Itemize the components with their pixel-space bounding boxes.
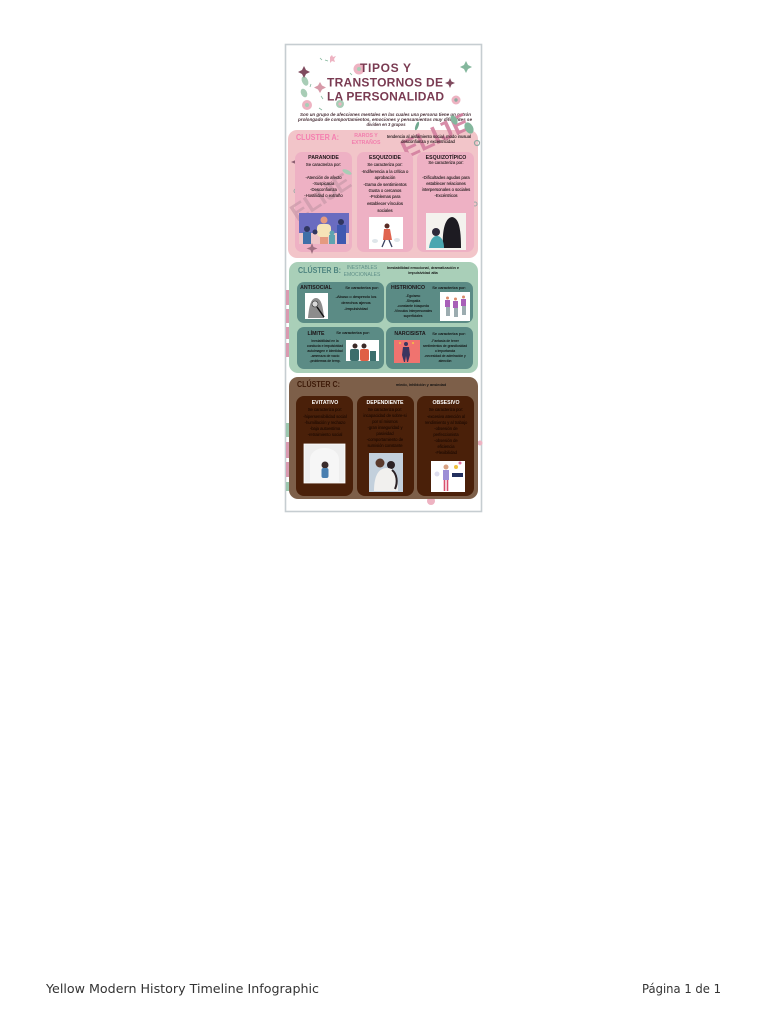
card: narcisista: -Fantasía de tener bbox=[431, 339, 460, 343]
card: narcisista: sentimientos de grandiosidad bbox=[423, 344, 467, 348]
card: dependiente bbox=[357, 396, 414, 496]
illustration: three dancers bbox=[440, 292, 470, 321]
infographic page frame bbox=[286, 44, 482, 512]
card: esquizotipico: Se caracteriza por: bbox=[428, 160, 464, 165]
card: obsesivo: -obsesión de bbox=[434, 438, 458, 443]
card: esquizoide: establecer vínculos bbox=[367, 201, 403, 206]
panel: cluster A bbox=[286, 107, 480, 258]
card: antisocial bbox=[297, 282, 384, 323]
illustration: person in glass dome bbox=[304, 444, 345, 483]
intro text: dividen en 3 grupos bbox=[366, 122, 406, 127]
cluster A subtitle: EXTRAÑOS bbox=[352, 139, 381, 146]
card: antisocial: Se caracteriza por: bbox=[345, 285, 379, 290]
card: narcisista: Se caracteriza por: bbox=[432, 331, 466, 336]
title: TRANSTORNOS DE bbox=[327, 76, 443, 90]
cluster B description bbox=[387, 265, 460, 275]
cluster A subtitle: RAROS Y bbox=[354, 133, 378, 139]
green leaves and rings bbox=[291, 114, 480, 206]
cluster B subtitle: INESTABLES bbox=[347, 265, 378, 271]
card: obsesivo: -excesiva atención al bbox=[427, 414, 465, 419]
card: paranoide: -Suspicacia bbox=[313, 181, 335, 186]
left edge decorative lettering bbox=[286, 290, 482, 505]
card: paranoide: Se caracteriza por: bbox=[306, 162, 341, 167]
card: obsesivo: eficiencia bbox=[437, 444, 455, 449]
card: obsesivo bbox=[417, 396, 474, 496]
intro text bbox=[297, 112, 473, 127]
card: narcisista bbox=[386, 327, 473, 369]
card: obsesivo: -Flexibilidad bbox=[435, 450, 458, 455]
card: antisocial: derechos ajenos bbox=[341, 300, 371, 305]
card: esquizoide: sociales bbox=[377, 208, 393, 213]
card: histrionico: Se caracteriza por: bbox=[432, 285, 466, 290]
card: histrionico: -Vínculos interpersonales bbox=[394, 309, 432, 313]
cluster A description: desconfianza y excentricidad bbox=[401, 139, 456, 144]
card: dependiente: Se caracteriza por: bbox=[368, 407, 402, 412]
card: limite: -amenaza de vacío bbox=[311, 354, 340, 358]
card: paranoide bbox=[286, 152, 356, 252]
cluster C description: miedo, inhibición y ansiedad bbox=[396, 382, 446, 387]
cluster A description: tendencia al aislamiento social, modo inusual bbox=[387, 134, 471, 139]
footer: page number: Página 1 de 1 bbox=[642, 981, 721, 996]
card: esquizoide: -Indiferencia a la crítica o bbox=[362, 169, 409, 174]
card: dependiente: por sí mismos bbox=[372, 419, 398, 424]
card: dependiente: sumisión constante bbox=[367, 443, 403, 448]
card: evitativo: -humillación y rechazo bbox=[305, 420, 346, 425]
title: LA PERSONALIDAD bbox=[327, 90, 444, 104]
illustration: arguing couple bbox=[346, 340, 379, 361]
card: limite bbox=[297, 327, 384, 369]
panel: cluster B bbox=[289, 262, 478, 373]
card: esquizoide: -Problemas para bbox=[370, 194, 401, 199]
illustration: person with thoughts bbox=[431, 461, 465, 492]
intro text: prolongado de comportamientos, emociones y pensamientos muy diferentes se bbox=[297, 117, 473, 122]
illustration: woman walking bbox=[369, 217, 403, 249]
watermark lettering: ELIJE bbox=[396, 107, 474, 164]
card: limite: conducta e impulsividad bbox=[307, 344, 343, 348]
card: evitativo: -hipersensibilidad social bbox=[303, 414, 347, 419]
card: dependiente: pasividad bbox=[376, 431, 394, 436]
card: limite: autoimagen e identidad bbox=[307, 349, 343, 353]
card: histrionico: -Simpatía bbox=[406, 299, 420, 303]
card: evitativo: EVITATIVO bbox=[312, 400, 338, 406]
card: histrionico: -constante búsqueda bbox=[397, 304, 429, 308]
card: dependiente: -gran inseguridad y bbox=[367, 425, 403, 430]
star bbox=[306, 243, 318, 254]
cluster B description: Inestabilidad emocional, dramatización e bbox=[387, 265, 460, 270]
card: esquizotipico: establecer relaciones bbox=[426, 181, 466, 186]
illustration: person with magnifier bbox=[305, 293, 328, 319]
card: evitativo: -baja autoestima bbox=[310, 426, 341, 431]
card: paranoide: -Atención de afecto bbox=[305, 175, 342, 180]
card: narcisista: o importancia bbox=[435, 349, 455, 353]
cluster A subtitle bbox=[352, 133, 381, 146]
title: TIPOS Y bbox=[360, 61, 411, 75]
card: obsesivo: OBSESIVO bbox=[432, 400, 460, 406]
illustration: group of people bbox=[299, 213, 349, 244]
cluster A description bbox=[387, 134, 471, 144]
card: esquizotipico: interpersonales o sociales bbox=[422, 187, 470, 192]
card: narcisista: atención bbox=[439, 359, 452, 363]
card: histrionico: HISTRIONICO bbox=[391, 285, 425, 291]
card: esquizotipico: -Excéntricos bbox=[434, 193, 458, 198]
footer: document name: Yellow Modern History Timeline Infographic bbox=[45, 981, 319, 996]
card: histrionico: -Egoísmo bbox=[406, 294, 420, 298]
title bbox=[327, 61, 444, 104]
card: narcisista: NARCISISTA bbox=[394, 331, 426, 337]
illustration: person with shadow bbox=[426, 213, 466, 250]
cluster B subtitle bbox=[344, 265, 381, 278]
card: evitativo: -retraimiento social bbox=[308, 432, 342, 437]
card: dependiente: DEPENDIENTE bbox=[367, 400, 404, 406]
cluster B subtitle: EMOCIONALES bbox=[344, 272, 381, 278]
card: limite: LÍMITE bbox=[307, 329, 325, 337]
card: narcisista: -necesidad de admiración y bbox=[424, 354, 466, 358]
card: dependiente: incapacidad de sobre-si bbox=[363, 413, 407, 418]
card: antisocial: -Abuso o desprecio los bbox=[336, 294, 376, 299]
card: limite: -problemas de temp. bbox=[309, 359, 341, 363]
card: paranoide: PARANOIDE bbox=[308, 155, 339, 161]
card: esquizoide bbox=[357, 152, 413, 252]
illustration: embracing couple bbox=[369, 453, 403, 492]
card: histrionico: superficiales bbox=[404, 314, 423, 318]
cluster B heading: CLÚSTER B: bbox=[298, 266, 341, 275]
card: esquizoide: ESQUIZOIDE bbox=[369, 155, 402, 161]
card: esquizoide: aprobación bbox=[375, 175, 396, 180]
card: esquizoide: Gusta o cercanos bbox=[369, 188, 401, 193]
card: limite: Inestabilidad en la bbox=[311, 339, 339, 343]
card: histrionico bbox=[386, 282, 473, 323]
card: evitativo bbox=[296, 396, 353, 496]
cluster B description: impulsividad alta bbox=[408, 270, 439, 275]
cluster C heading: CLÚSTER C: bbox=[297, 380, 340, 389]
illustration: figure on pink bbox=[394, 340, 420, 363]
card: esquizoide: Se caracteriza por: bbox=[367, 162, 403, 167]
card: obsesivo: Se caracteriza por: bbox=[429, 407, 463, 412]
watermark on card: ELIJE bbox=[286, 168, 356, 227]
card: obsesivo: rendimiento y al trabajo bbox=[425, 420, 468, 425]
card: obsesivo: perfeccionista bbox=[433, 432, 459, 437]
card: antisocial: ANTISOCIAL bbox=[300, 285, 333, 291]
card: paranoide: -Hostilidad o extraño bbox=[304, 193, 343, 198]
card: esquizotipico: -Dificultades agudas para bbox=[422, 175, 470, 180]
card: dependiente: -comportamiento de bbox=[367, 437, 404, 442]
card: limite: Se caracteriza por: bbox=[336, 330, 370, 335]
decorative flowers and sparkles bbox=[298, 55, 472, 110]
card: evitativo: Se caracteriza por: bbox=[308, 407, 342, 412]
card: paranoide: -Desconfianza bbox=[310, 187, 338, 192]
card: esquizotipico: ESQUIZOTÍPICO bbox=[426, 153, 466, 161]
card: esquizoide: -Gama de sentimientos bbox=[363, 182, 407, 187]
card: obsesivo: -obsesión de bbox=[434, 426, 458, 431]
intro text: Son un grupo de afecciones mentales en las cuales una persona tiene un patrón bbox=[300, 112, 471, 117]
cluster A heading: CLUSTER A: bbox=[296, 133, 339, 142]
card: antisocial: -Impulsividad bbox=[344, 306, 368, 311]
card: esquizotipico bbox=[417, 152, 474, 252]
panel: cluster C bbox=[289, 377, 478, 499]
